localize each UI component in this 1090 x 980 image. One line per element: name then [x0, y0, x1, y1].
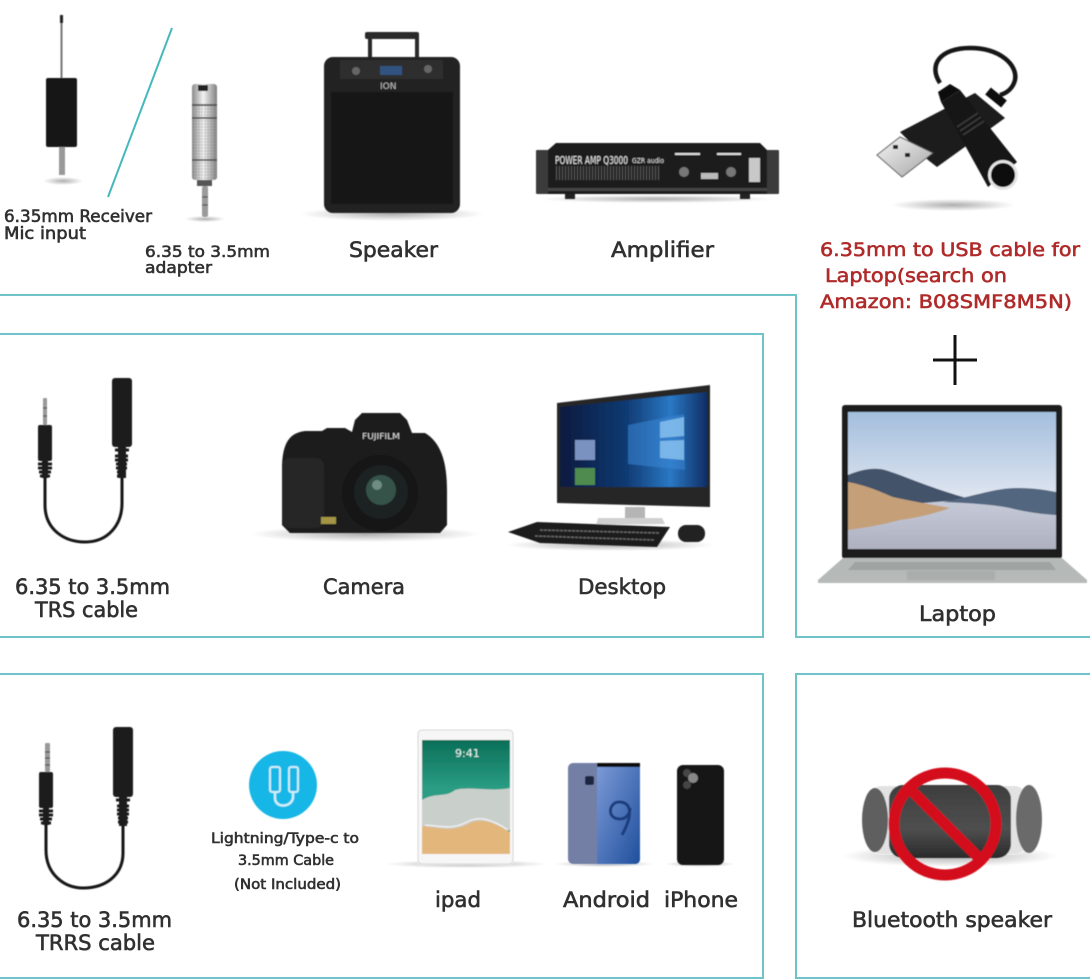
label: adapter: adapter — [145, 258, 212, 277]
icon: laptop — [818, 405, 1087, 583]
icon: Android phone — [554, 763, 654, 867]
label: TRRS cable: 6.35 to 3.5mm — [17, 908, 172, 932]
icon: plus — [933, 335, 977, 385]
label: USB cable note: 6.35mm to USB cable for — [820, 239, 1080, 261]
label: receiver: Mic input — [4, 224, 87, 243]
icon: lightning adapter — [249, 751, 317, 819]
label: adapter note: 3.5mm Cable — [238, 853, 334, 869]
icon: wireless receiver — [43, 15, 83, 185]
panel: Bluetooth speaker — [796, 674, 1090, 978]
icon: TRS cable — [38, 378, 132, 542]
panel: TRS devices — [0, 334, 763, 637]
label: amplifier: Amplifier — [611, 238, 714, 262]
label: receiver: 6.35mm Receiver — [4, 207, 152, 226]
icon: amplifier: POWER AMP Q3000 — [555, 154, 628, 167]
label: laptop: Laptop — [919, 602, 996, 626]
label: speaker: Speaker — [349, 238, 438, 262]
icon: USB cable — [877, 48, 1018, 211]
label: USB cable note: Amazon: B08SMF8M5N) — [820, 291, 1072, 313]
icon: speaker: ION — [380, 82, 396, 92]
label: adapter — [145, 242, 270, 277]
divider line — [108, 28, 172, 197]
label: TRRS cable: TRRS cable — [35, 931, 155, 955]
label: adapter note: (Not Included) — [234, 877, 341, 893]
label: receiver — [4, 207, 152, 243]
label: TRS cable: TRS cable — [34, 598, 138, 622]
label: adapter note: Lightning/Type-c to — [211, 831, 359, 847]
icon: desktop computer — [505, 385, 715, 551]
icon: amplifier — [536, 143, 779, 203]
label: TRS cable — [15, 575, 170, 622]
icon: amplifier: GZR audio — [632, 157, 664, 165]
icon: iPad: 9:41 — [455, 747, 480, 760]
icon: iPad — [384, 730, 548, 868]
label: iPad: ipad — [435, 888, 481, 912]
label: Android: Android — [563, 888, 650, 912]
icon: iPhone — [665, 765, 735, 867]
icon: speaker — [300, 32, 484, 221]
label: USB cable note — [820, 239, 1080, 313]
icon: camera: FUJIFILM — [362, 432, 400, 441]
label: camera: Camera — [323, 575, 405, 599]
label: adapter: 6.35 to 3.5mm — [145, 242, 270, 261]
icon: prohibited Bluetooth speaker — [842, 773, 1058, 875]
label: TRS cable: 6.35 to 3.5mm — [15, 575, 170, 599]
panel: TRRS devices — [0, 674, 763, 978]
label: desktop: Desktop — [578, 575, 666, 599]
label: TRRS cable — [17, 908, 172, 955]
label: Bluetooth speaker: Bluetooth speaker — [852, 908, 1052, 932]
label: iPhone: iPhone — [664, 888, 738, 912]
icon: camera — [250, 413, 480, 542]
panel: laptop connection frame — [0, 295, 1090, 637]
label: adapter note — [211, 831, 359, 893]
icon: TRRS cable — [39, 727, 133, 888]
label: USB cable note: Laptop(search on — [825, 265, 1007, 287]
icon: 6.35 to 3.5mm adapter — [185, 84, 225, 222]
